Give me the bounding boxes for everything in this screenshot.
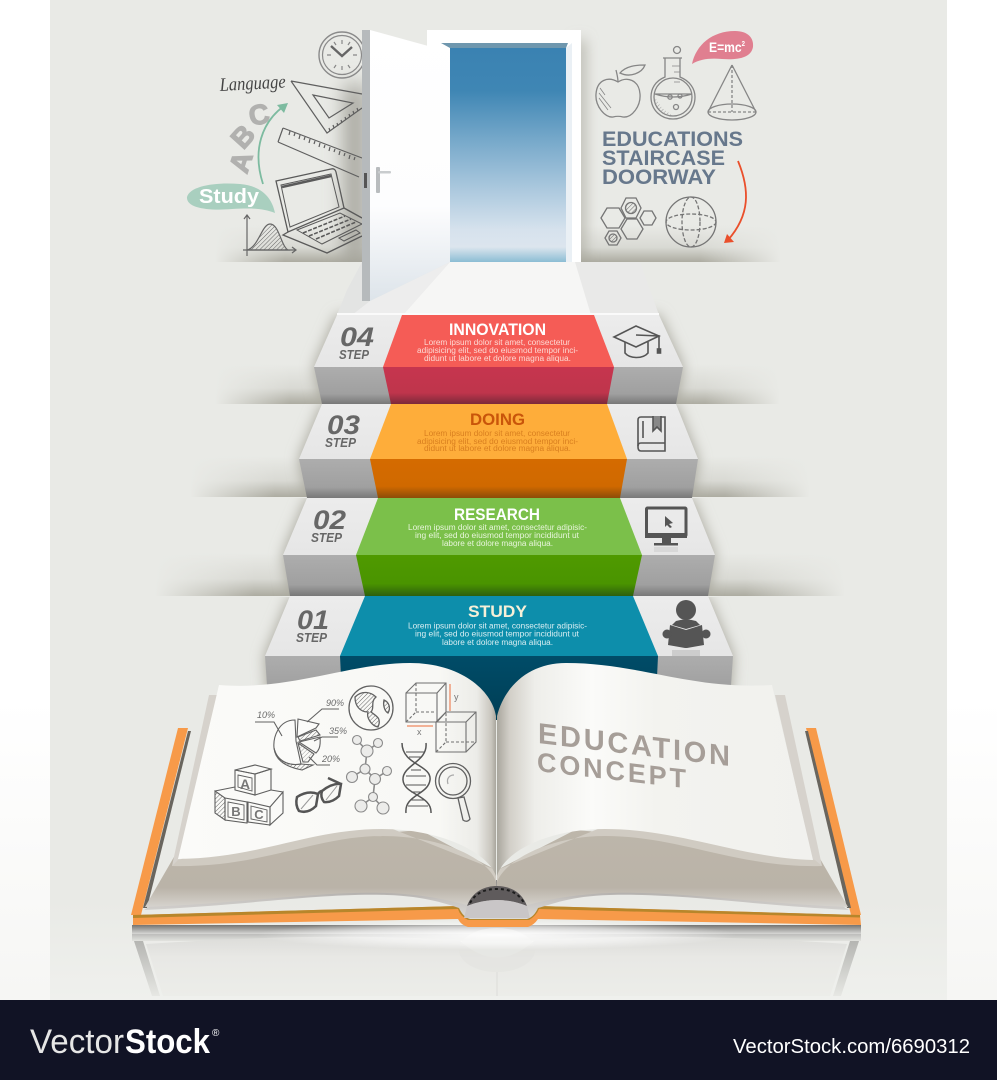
step number 01: 01	[297, 605, 329, 635]
sketch: alphabet blocks	[215, 765, 283, 825]
bottom cover strip	[133, 906, 861, 927]
icon: computer monitor	[645, 508, 687, 552]
icon: hexagons	[601, 198, 656, 245]
ABC letters: B	[225, 119, 261, 155]
tag: Study	[187, 184, 275, 213]
book sketches	[215, 683, 476, 825]
body text: doing: didunt ut labore et dolore magna aliqua.	[424, 444, 571, 453]
body text: innovation: Lorem ipsum dolor sit amet, consectetur	[424, 338, 570, 347]
step number 01: STEP	[296, 631, 328, 645]
body text: innovation: adipisicing elit, sed do eiusmod tempor inci-	[417, 346, 578, 355]
heading: research: RESEARCH	[454, 505, 540, 524]
chart: bell curve	[243, 215, 296, 256]
sketch: alphabet blocks: A	[240, 776, 250, 792]
sketch: alphabet blocks: B	[231, 804, 241, 819]
heading: doing: DOING	[470, 410, 525, 429]
page block: right stack	[497, 830, 848, 907]
text: Language: Language	[218, 72, 286, 96]
heading: study: STUDY	[468, 602, 528, 621]
door frame	[427, 30, 581, 262]
sketch: pie chart: 10%	[257, 710, 275, 720]
step number 04: STEP	[339, 348, 370, 362]
step number 02: 02	[313, 505, 346, 535]
step number 04: 04	[340, 322, 374, 352]
icon: book with bookmark	[638, 416, 665, 451]
step 01: study	[265, 596, 733, 720]
body text: research	[408, 523, 587, 548]
sketch: alphabet blocks: C	[254, 807, 264, 822]
door edge	[362, 30, 370, 301]
wall and ledge shadows	[155, 40, 845, 705]
icon: person reading	[662, 600, 710, 656]
door leaf	[370, 30, 450, 301]
icon: cone	[708, 65, 756, 120]
logo: VectorStock: Stock	[125, 1023, 210, 1061]
body text: study	[408, 622, 587, 647]
sketch: pie chart: 35%	[329, 726, 347, 736]
step number 03: 03	[327, 410, 360, 440]
teal band	[340, 596, 658, 656]
body text: research: ing elit, sed do eiusmod tempor incididunt ut	[415, 531, 580, 540]
book spine	[464, 886, 530, 918]
icon: set square	[291, 81, 362, 133]
body text: innovation: didunt ut labore et dolore magna aliqua.	[424, 354, 571, 363]
title: educations staircase doorway: STAIRCASE	[602, 147, 725, 170]
icon: flask	[651, 46, 695, 119]
heading: innovation: INNOVATION	[449, 320, 546, 339]
door handle	[376, 167, 391, 193]
title: educations staircase doorway	[602, 128, 743, 189]
sketch: cubes	[406, 683, 476, 752]
ABC letters: A	[223, 148, 259, 176]
step number 01	[296, 605, 329, 645]
step number 02	[311, 505, 346, 545]
top landing	[337, 262, 659, 315]
sketch: globe	[349, 686, 393, 730]
callout: E=mc2: E=mc	[709, 39, 747, 55]
callout: E=mc2: 2	[742, 41, 745, 48]
logo: VectorStock	[30, 1023, 220, 1061]
open book	[131, 663, 861, 996]
page heading: education concept: EDUCATION	[538, 718, 730, 773]
step number 02: STEP	[311, 531, 343, 545]
book reflection	[132, 920, 861, 996]
ABC letters: C	[246, 97, 272, 132]
doorway sky opening	[450, 48, 566, 262]
page block: left stack	[145, 830, 496, 907]
arrow: green upward curve	[259, 103, 288, 184]
title: educations staircase doorway: EDUCATIONS	[602, 128, 743, 151]
icon: apple	[596, 65, 645, 117]
right page	[497, 663, 813, 876]
step 02: research	[283, 498, 715, 596]
lower sheet edges	[172, 695, 822, 882]
icon: clock	[319, 32, 365, 78]
body text: study: labore et dolore magna aliqua.	[442, 638, 553, 647]
sketch: magnifier	[436, 764, 470, 821]
sketch: glasses	[296, 778, 341, 812]
sketch: cubes: y	[454, 692, 459, 702]
body text: doing: Lorem ipsum dolor sit amet, consectetur	[424, 429, 570, 438]
body text: doing	[417, 429, 578, 453]
ABC letters	[223, 97, 272, 176]
sketch: pie chart	[255, 698, 347, 770]
step number 03: STEP	[325, 436, 357, 450]
left doodles: study sketches	[187, 32, 365, 256]
right doodles: science sketches	[596, 31, 756, 247]
step 04: innovation	[314, 315, 683, 404]
logo: VectorStock: ®	[212, 1028, 220, 1039]
body text: study: Lorem ipsum dolor sit amet, consectetur adipisic-	[408, 622, 587, 630]
logo: VectorStock: Vector	[30, 1023, 124, 1061]
door	[362, 30, 581, 301]
icon: wire globe	[666, 197, 716, 247]
icon: laptop	[276, 169, 362, 253]
sketch: pie chart: 20%	[321, 754, 340, 764]
left page	[178, 663, 496, 876]
sketch: molecule	[346, 736, 392, 814]
step 03: doing	[299, 404, 698, 498]
page block: under-shadow	[144, 880, 849, 919]
red band	[383, 315, 614, 367]
page heading: education concept: CONCEPT	[537, 746, 686, 794]
body text: research: labore et dolore magna aliqua.	[442, 539, 553, 548]
body text: research: Lorem ipsum dolor sit amet, consectetur adipisic-	[408, 523, 587, 532]
sketch: pie chart: 90%	[326, 698, 344, 708]
orange band	[370, 404, 627, 459]
body text: doing: adipisicing elit, sed do eiusmod tempor inci-	[417, 437, 578, 446]
arrow: red downward curve	[724, 161, 746, 243]
callout: E=mc2	[692, 31, 753, 64]
image url text: VectorStock.com/6690312	[733, 1036, 970, 1058]
icon: ruler	[278, 128, 362, 177]
tag: Study: Study	[199, 186, 260, 208]
footer bar	[0, 1000, 997, 1080]
title: educations staircase doorway: DOORWAY	[602, 166, 716, 189]
sketch: DNA helix	[402, 743, 431, 813]
body text: innovation	[417, 338, 578, 363]
body text: study: ing elit, sed do eiusmod tempor incididunt ut	[415, 630, 580, 638]
green band	[356, 498, 642, 555]
sketch: cubes: x	[417, 727, 422, 737]
icon: graduation cap	[614, 326, 660, 358]
step number 03	[325, 410, 360, 450]
step number 04	[339, 322, 374, 362]
cover edges	[131, 728, 861, 915]
